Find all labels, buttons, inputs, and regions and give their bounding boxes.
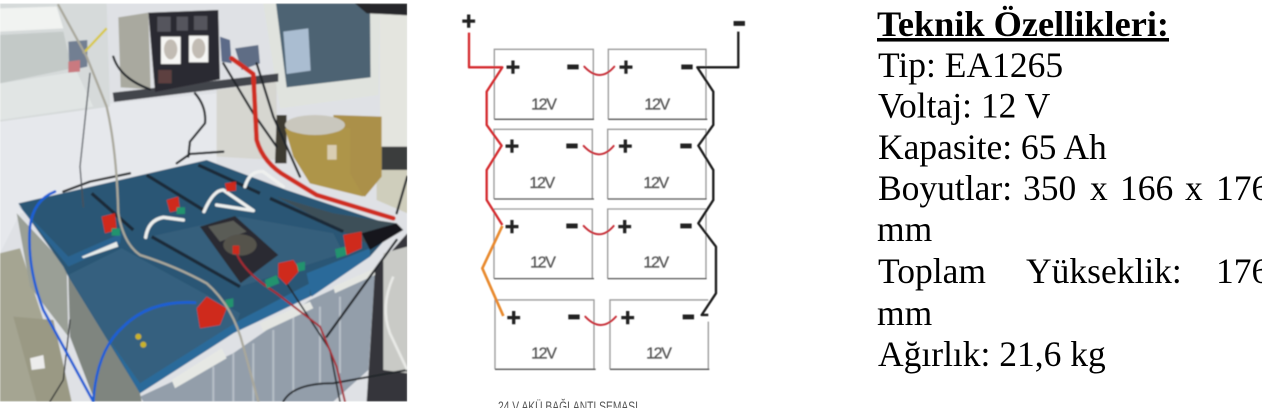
diagram symbols and labels: −	[568, 57, 578, 76]
diagram symbols and labels: +	[505, 134, 519, 161]
diagram symbols and labels: 12V	[643, 255, 670, 272]
blue cables	[29, 192, 195, 402]
orange wire	[482, 226, 503, 316]
spec: weight: Ağırlık: 21,6 kg	[878, 334, 1106, 374]
battery bottom edges	[494, 119, 709, 369]
diagram symbols and labels: 12V	[646, 345, 672, 362]
diagram symbols and labels: +	[506, 305, 521, 332]
battery lids	[18, 160, 397, 393]
shelf	[113, 73, 278, 102]
photo background: wall and floor	[0, 3, 407, 402]
plastic bag on wall	[0, 3, 110, 122]
spec: dimensions: x	[1090, 168, 1108, 208]
diagram symbols and labels: +	[506, 54, 520, 81]
diagram symbols and labels: −	[681, 137, 691, 156]
spec: dimensions: 166	[1120, 168, 1173, 208]
thin red multimeter cable	[235, 248, 345, 402]
spec: dimensions unit: mm	[877, 209, 933, 249]
specifications heading: Teknik Özellikleri:	[877, 4, 1169, 44]
spec: voltage: Voltaj: 12 V	[878, 86, 1051, 126]
diagram symbols and labels: 12V	[531, 96, 557, 113]
diagram symbols and labels: 12V	[529, 175, 556, 192]
diagram symbols and labels: 12V	[644, 96, 671, 113]
wiring diagram: 24 V battery connection	[461, 9, 744, 369]
red positive wire	[469, 33, 502, 225]
panel: technical specifications	[877, 4, 1262, 374]
spec: dimensions: Boyutlar:	[878, 168, 1012, 208]
white cables at right	[386, 277, 407, 370]
spec: type: Tip: EA1265	[878, 45, 1063, 85]
spec: total height: Toplam	[878, 251, 986, 291]
battery seams	[92, 165, 343, 287]
battery sides	[17, 213, 407, 402]
diagram symbols and labels: +	[617, 214, 632, 241]
spec: dimensions: 350	[1023, 168, 1076, 208]
diagram symbols and labels: 12V	[531, 345, 557, 362]
diagram symbols and labels: −	[682, 57, 692, 76]
inverter with sockets	[118, 10, 260, 92]
battery outlines	[494, 49, 708, 369]
black terminal box	[362, 223, 403, 250]
diagram symbols and labels: −	[681, 217, 691, 236]
diagram symbols and labels: +	[619, 54, 633, 81]
diagram symbols and labels: 12V	[643, 175, 670, 192]
spec: total height unit: mm	[877, 293, 933, 333]
red terminals	[102, 182, 362, 328]
series links	[584, 67, 616, 325]
spec: dimensions: x	[1185, 168, 1203, 208]
diagram symbols and labels: +	[620, 305, 635, 332]
grey cable	[58, 5, 258, 402]
cardboard boxes	[275, 115, 382, 197]
diagram symbols and labels: +	[461, 9, 476, 36]
diagram symbols and labels: −	[567, 217, 577, 236]
red main cable	[232, 58, 393, 218]
diagram symbols and labels: +	[505, 214, 519, 241]
diagram symbols and labels: −	[569, 307, 579, 326]
green terminal connectors	[112, 207, 347, 308]
diagram symbols and labels: +	[618, 134, 633, 161]
photo: battery bank with inverter	[0, 3, 407, 402]
diagram symbols and labels	[461, 9, 744, 362]
monitor	[274, 3, 408, 89]
spec: capacity: Kapasite: 65 Ah	[878, 127, 1107, 167]
diagram symbols and labels: −	[734, 14, 744, 33]
white link cables	[146, 171, 283, 237]
black negative wire	[697, 32, 738, 315]
diagram symbols and labels: 12V	[530, 255, 556, 272]
diagram symbols and labels: −	[683, 307, 693, 326]
multimeter	[200, 216, 278, 283]
spec: total height: Yükseklik:	[1026, 251, 1182, 291]
black cables	[50, 57, 407, 402]
diagram symbols and labels: −	[567, 137, 577, 156]
